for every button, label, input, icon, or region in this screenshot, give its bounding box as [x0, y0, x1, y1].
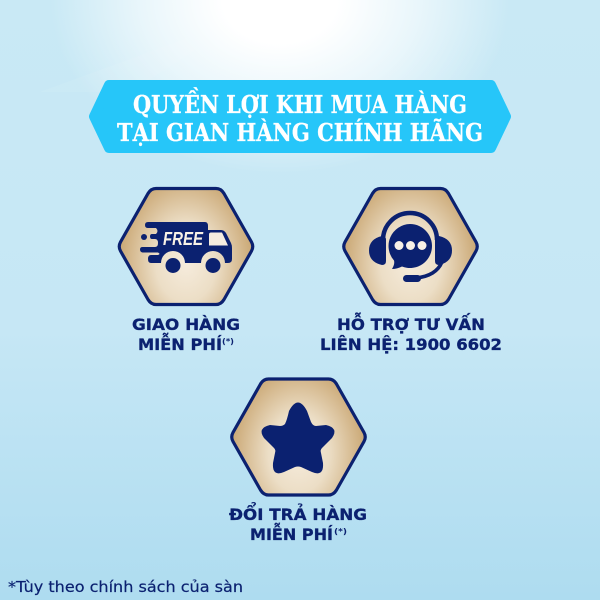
benefit: free delivery	[119, 188, 253, 354]
icon: delivery truck: FREE	[163, 229, 204, 249]
benefit: free returns	[229, 379, 367, 544]
label: HỖ TRỢ TƯ VẤN	[337, 313, 485, 334]
title line 2: TẠI GIAN HÀNG CHÍNH HÃNG	[117, 118, 483, 147]
icon: delivery truck	[140, 222, 232, 273]
hexagon badge	[344, 188, 477, 304]
benefit: free returns: (*)	[334, 527, 347, 536]
benefit: free returns: MIỄN PHÍ	[250, 523, 333, 544]
icon: star	[262, 402, 334, 473]
label: GIAO HÀNG	[132, 315, 240, 334]
benefit: consulting support	[320, 188, 502, 354]
icon: headset with chat bubble	[369, 213, 452, 282]
benefit: free delivery: MIỄN PHÍ	[138, 333, 222, 354]
title line 1: QUYỀN LỢI KHI MUA HÀNG	[133, 87, 467, 119]
footnote: *Tùy theo chính sách của sàn	[8, 578, 243, 596]
label: ĐỔI TRẢ HÀNG	[229, 502, 367, 524]
title banner	[94, 85, 506, 148]
benefit: free delivery: (*)	[222, 337, 234, 346]
benefit: consulting support: LIÊN HỆ: 1900 6602	[320, 334, 502, 354]
hexagon badge	[232, 379, 365, 495]
hexagon badge	[119, 188, 253, 304]
